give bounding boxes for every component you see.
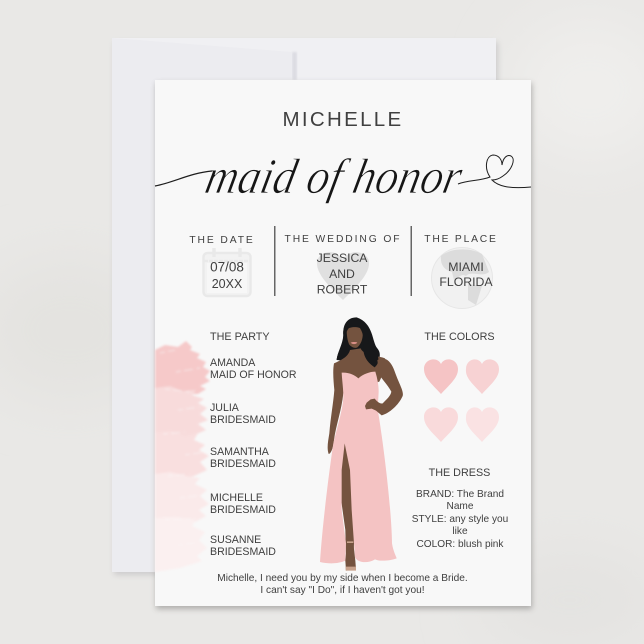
panel: the party list: BRIDESMAID [210,458,276,470]
script title: maid of honor: maid of honor [201,148,468,204]
footer message: I can't say "I Do", if I haven't got you! [260,585,425,596]
info column: the wedding of: ROBERT [317,282,368,296]
panel: the party list: BRIDESMAID [210,546,276,558]
info column: the place: THE PLACE [424,234,498,245]
footer message [217,573,468,596]
panel: the party list: JULIA [210,402,240,414]
panel: the party list: MICHELLE [210,492,263,504]
panel: the party list: BRIDESMAID [210,414,276,426]
panel: the party list [210,331,297,558]
panel: the party list: SAMANTHA [210,446,270,458]
icon: globe [432,248,492,308]
leg [341,443,356,558]
card [155,80,532,609]
panel: the dress [412,467,508,550]
dress [320,372,397,563]
envelope [112,38,498,575]
panel: the colors: THE COLORS [424,331,495,343]
panel: the party list: SUSANNE [210,534,261,546]
panel: the party list: BRIDESMAID [210,504,276,516]
info column: the date: THE DATE [189,235,255,246]
info column: the date [189,235,255,296]
shoe [345,543,356,571]
panel: the dress: Name [447,501,474,512]
divider [410,226,412,296]
info column: the place: FLORIDA [439,275,493,289]
icon: calendar [204,248,250,296]
watercolor brush stroke [155,341,210,572]
info column: the date: 20XX [212,277,243,291]
info column: the wedding of: AND [329,267,355,281]
info column: the wedding of: JESSICA [317,251,368,265]
divider [274,226,276,296]
panel: the party list: THE PARTY [210,331,270,343]
info column: the place [424,234,498,308]
info column: the wedding of [285,234,401,300]
footer message: Michelle, I need you by my side when I become a Bride. [217,573,468,584]
illustration: woman in pink dress [320,317,403,571]
panel: the dress: THE DRESS [429,467,490,479]
info column: the wedding of: THE WEDDING OF [285,234,401,245]
skin: body and left arm [328,348,386,454]
hair back [337,317,380,367]
panel: the dress: BRAND: The Brand [416,489,504,500]
right arm with hand on hip [365,359,403,415]
name heading: MICHELLE [283,108,403,131]
panel: the dress: COLOR: blush pink [417,539,504,550]
panel: the colors [424,331,499,442]
panel: the party list: AMANDA [210,357,256,369]
hearts [424,359,458,394]
info column: the date: 07/08 [210,260,244,274]
hair front [337,318,378,367]
panel: the dress: STYLE: any style you [412,514,508,525]
panel: the dress: like [452,526,468,537]
icon: grey heart [317,252,369,300]
panel: the party list: MAID OF HONOR [210,369,297,381]
info column: the place: MIAMI [448,260,484,274]
face [347,327,363,348]
